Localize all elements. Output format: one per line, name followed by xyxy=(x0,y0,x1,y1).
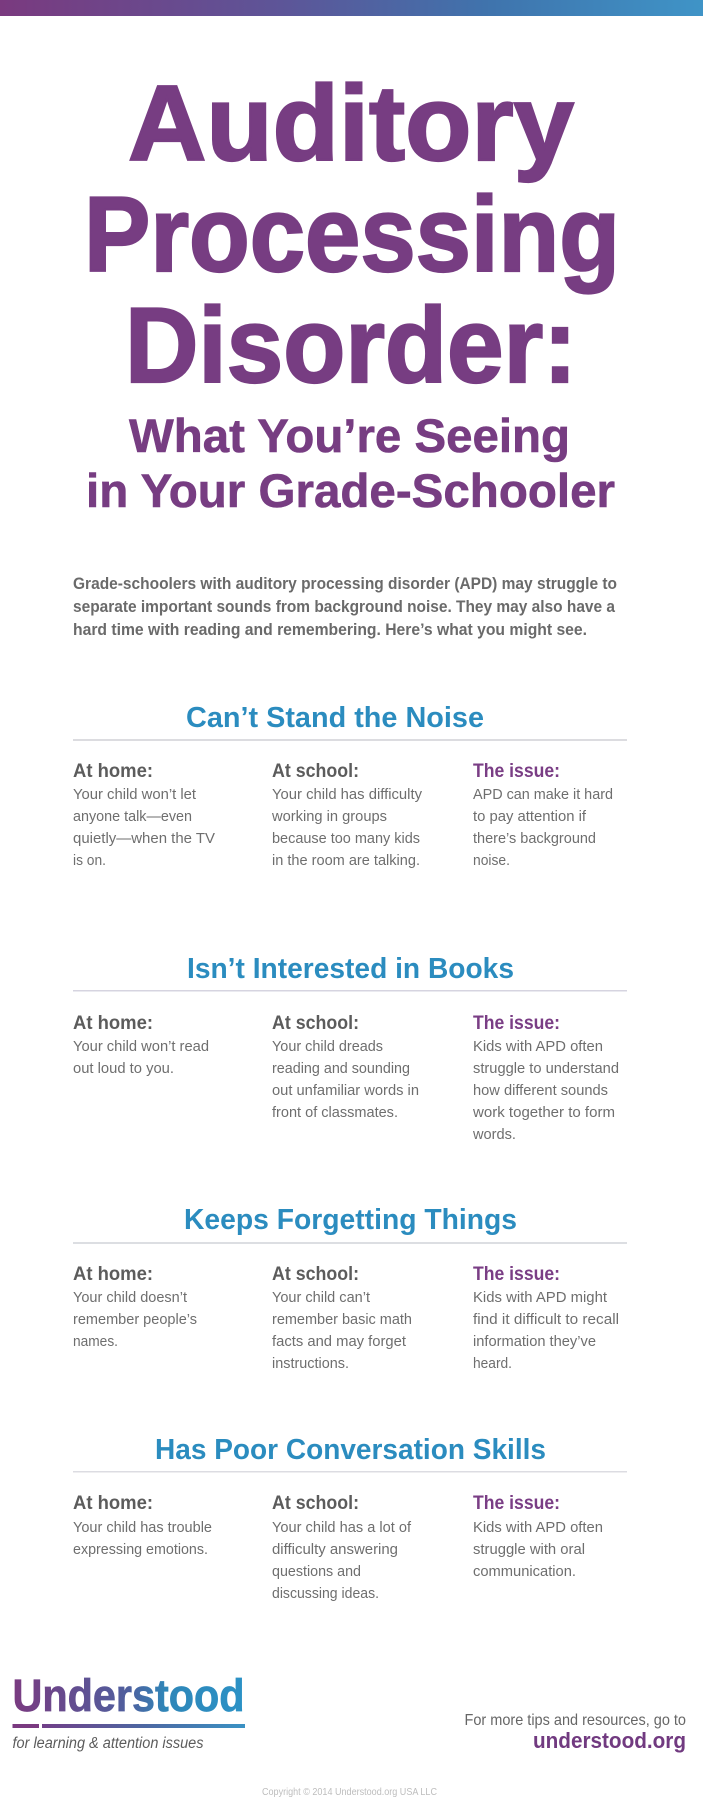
column: at school: discussing ideas. xyxy=(272,1585,379,1602)
column: at school: remember basic math xyxy=(272,1311,412,1328)
heading: Has Poor Conversation Skills xyxy=(155,1434,546,1466)
column: the issue: The issue: xyxy=(473,1493,560,1514)
column: at home: names. xyxy=(73,1333,118,1350)
column: at home: out loud to you. xyxy=(73,1060,174,1077)
subtitle xyxy=(86,409,615,517)
column: at school: out unfamiliar words in xyxy=(272,1082,419,1099)
intro text: separate important sounds from background noise. They may also have a xyxy=(73,597,615,616)
column: at home: remember people’s xyxy=(73,1311,197,1328)
column: at school: facts and may forget xyxy=(272,1333,407,1350)
column: at school xyxy=(272,1493,412,1602)
call to action: For more tips and resources, go to xyxy=(464,1712,686,1729)
column: at school: front of classmates. xyxy=(272,1104,398,1121)
title xyxy=(84,63,620,405)
column: the issue: there’s background xyxy=(473,830,596,847)
title: Disorder: xyxy=(125,285,577,405)
column: at school xyxy=(271,761,422,869)
intro text xyxy=(73,574,617,639)
heading: Can’t Stand the Noise xyxy=(186,702,484,734)
top gradient bar xyxy=(0,0,703,16)
heading: Isn’t Interested in Books xyxy=(187,953,514,985)
column: at home: At home: xyxy=(73,1493,153,1514)
column: at school xyxy=(272,1013,419,1121)
copyright: Copyright © 2014 Understood.org USA LLC xyxy=(262,1786,437,1798)
column: the issue xyxy=(473,1264,619,1372)
column: at home: Your child won’t read xyxy=(73,1038,209,1055)
column: the issue: The issue: xyxy=(473,1264,560,1285)
column: the issue: noise. xyxy=(473,852,510,869)
column: the issue: struggle to understand xyxy=(473,1060,619,1077)
column: at school: in the room are talking. xyxy=(272,852,420,869)
column: the issue: heard. xyxy=(473,1355,512,1372)
column: at home: Your child won’t let xyxy=(73,786,197,803)
intro text: hard time with reading and remembering. Here’s what you might see. xyxy=(73,620,587,639)
column: at school: Your child has a lot of xyxy=(272,1519,412,1536)
column: at home: At home: xyxy=(73,761,153,782)
column: at school: Your child has difficulty xyxy=(272,786,422,803)
column: at school: reading and sounding xyxy=(272,1060,410,1077)
column: at school: Your child can’t xyxy=(272,1289,371,1306)
column: the issue: The issue: xyxy=(473,1013,560,1034)
column: at school xyxy=(272,1264,412,1372)
column: the issue: to pay attention if xyxy=(473,808,587,825)
panel: isn't interested in books xyxy=(73,953,627,1143)
column: at school: working in groups xyxy=(271,808,387,825)
logo: Understood xyxy=(12,1670,245,1752)
column: at home xyxy=(73,1013,209,1077)
column: at home xyxy=(73,1493,212,1558)
call to action: understood.org xyxy=(533,1728,686,1753)
column: the issue: Kids with APD often xyxy=(473,1519,603,1536)
logo: Understood: for learning & attention issues xyxy=(12,1735,204,1752)
column: at home xyxy=(73,761,215,869)
call to action xyxy=(464,1712,686,1753)
column: at school: At school: xyxy=(272,761,359,782)
column: at home: At home: xyxy=(73,1264,153,1285)
panel: can't stand the noise xyxy=(73,702,627,869)
column: at home xyxy=(73,1264,197,1350)
column: the issue: find it difficult to recall xyxy=(473,1311,619,1328)
column: at home: quietly—when the TV xyxy=(73,830,215,847)
column: at home: At home: xyxy=(73,1013,153,1034)
title: Processing xyxy=(84,174,620,294)
column: at school: Your child dreads xyxy=(272,1038,383,1055)
column: the issue: communication. xyxy=(473,1563,576,1580)
column: the issue: APD can make it hard xyxy=(473,786,613,803)
column: at home: is on. xyxy=(73,852,106,869)
column: at home: expressing emotions. xyxy=(73,1541,208,1558)
column: the issue: information they’ve xyxy=(473,1333,596,1350)
panel: has poor conversation skills xyxy=(73,1434,627,1602)
subtitle: in Your Grade-Schooler xyxy=(86,464,615,517)
column: at school: instructions. xyxy=(272,1355,349,1372)
column: the issue: words. xyxy=(472,1126,516,1143)
column: at school: At school: xyxy=(272,1264,359,1285)
column: at school: difficulty answering xyxy=(272,1541,398,1558)
panel: keeps forgetting things xyxy=(73,1204,627,1372)
column: the issue: work together to form xyxy=(472,1104,615,1121)
column: at school: questions and xyxy=(272,1563,361,1580)
column: the issue xyxy=(473,761,613,869)
column: the issue: Kids with APD might xyxy=(473,1289,608,1306)
column: the issue: The issue: xyxy=(473,761,560,782)
column: at home: anyone talk—even xyxy=(73,808,192,825)
column: the issue: Kids with APD often xyxy=(473,1038,603,1055)
title: Auditory xyxy=(128,63,574,183)
column: at school: At school: xyxy=(272,1013,359,1034)
column: the issue: how different sounds xyxy=(473,1082,608,1099)
logo: Understood: Understood xyxy=(12,1670,244,1721)
column: at home: Your child doesn’t xyxy=(73,1289,188,1306)
column: at school: because too many kids xyxy=(272,830,420,847)
subtitle: What You’re Seeing xyxy=(129,409,570,462)
column: the issue xyxy=(472,1013,619,1143)
column: the issue: struggle with oral xyxy=(473,1541,585,1558)
column: at school: At school: xyxy=(272,1493,359,1514)
heading: Keeps Forgetting Things xyxy=(184,1204,517,1236)
column: the issue xyxy=(473,1493,603,1580)
column: at home: Your child has trouble xyxy=(73,1519,212,1536)
intro text: Grade-schoolers with auditory processing disorder (APD) may struggle to xyxy=(73,574,617,593)
